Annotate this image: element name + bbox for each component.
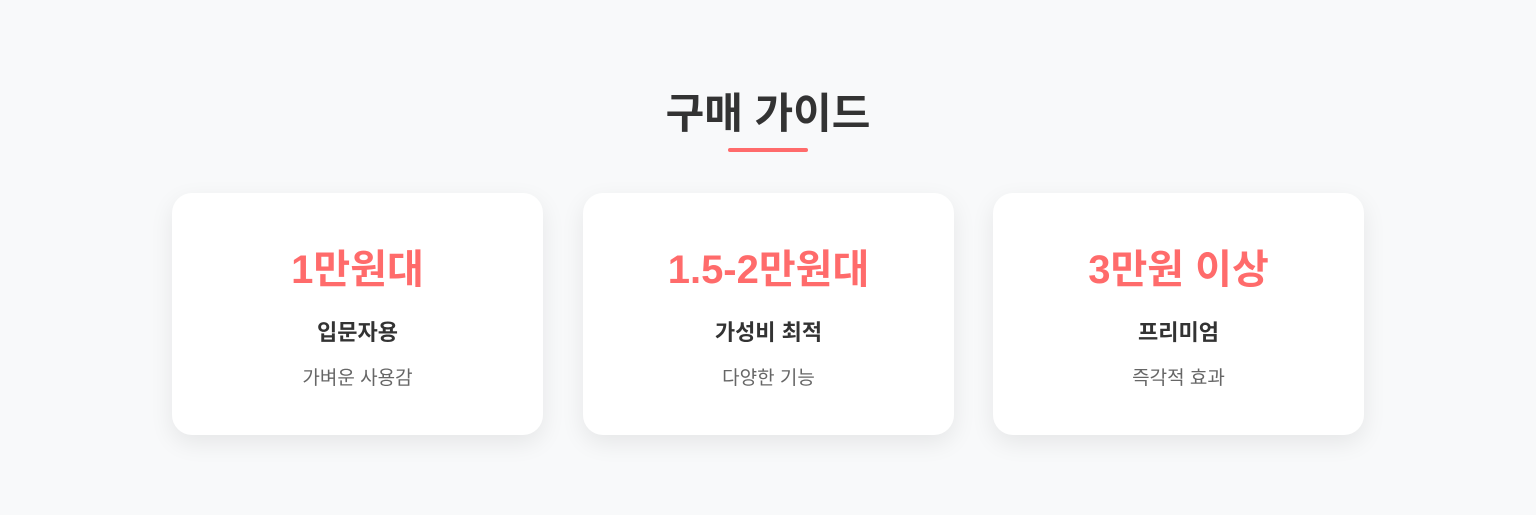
panel: 3만원 이상 (993, 193, 1364, 435)
price heading: 1.5-2만원대 (668, 248, 869, 292)
panel: 1.5-2만원대 (583, 193, 954, 435)
subtitle: 입문자용 (317, 320, 398, 345)
description: 가벼운 사용감 (302, 368, 413, 389)
panel: 1만원대 (172, 193, 543, 435)
description: 즉각적 효과 (1132, 368, 1225, 389)
title: 구매 가이드 (666, 90, 870, 137)
description: 다양한 기능 (722, 368, 815, 389)
price heading: 3만원 이상 (1088, 248, 1269, 292)
title underline (728, 148, 808, 152)
subtitle: 가성비 최적 (715, 320, 822, 345)
price heading: 1만원대 (291, 248, 424, 292)
subtitle: 프리미엄 (1138, 320, 1219, 345)
